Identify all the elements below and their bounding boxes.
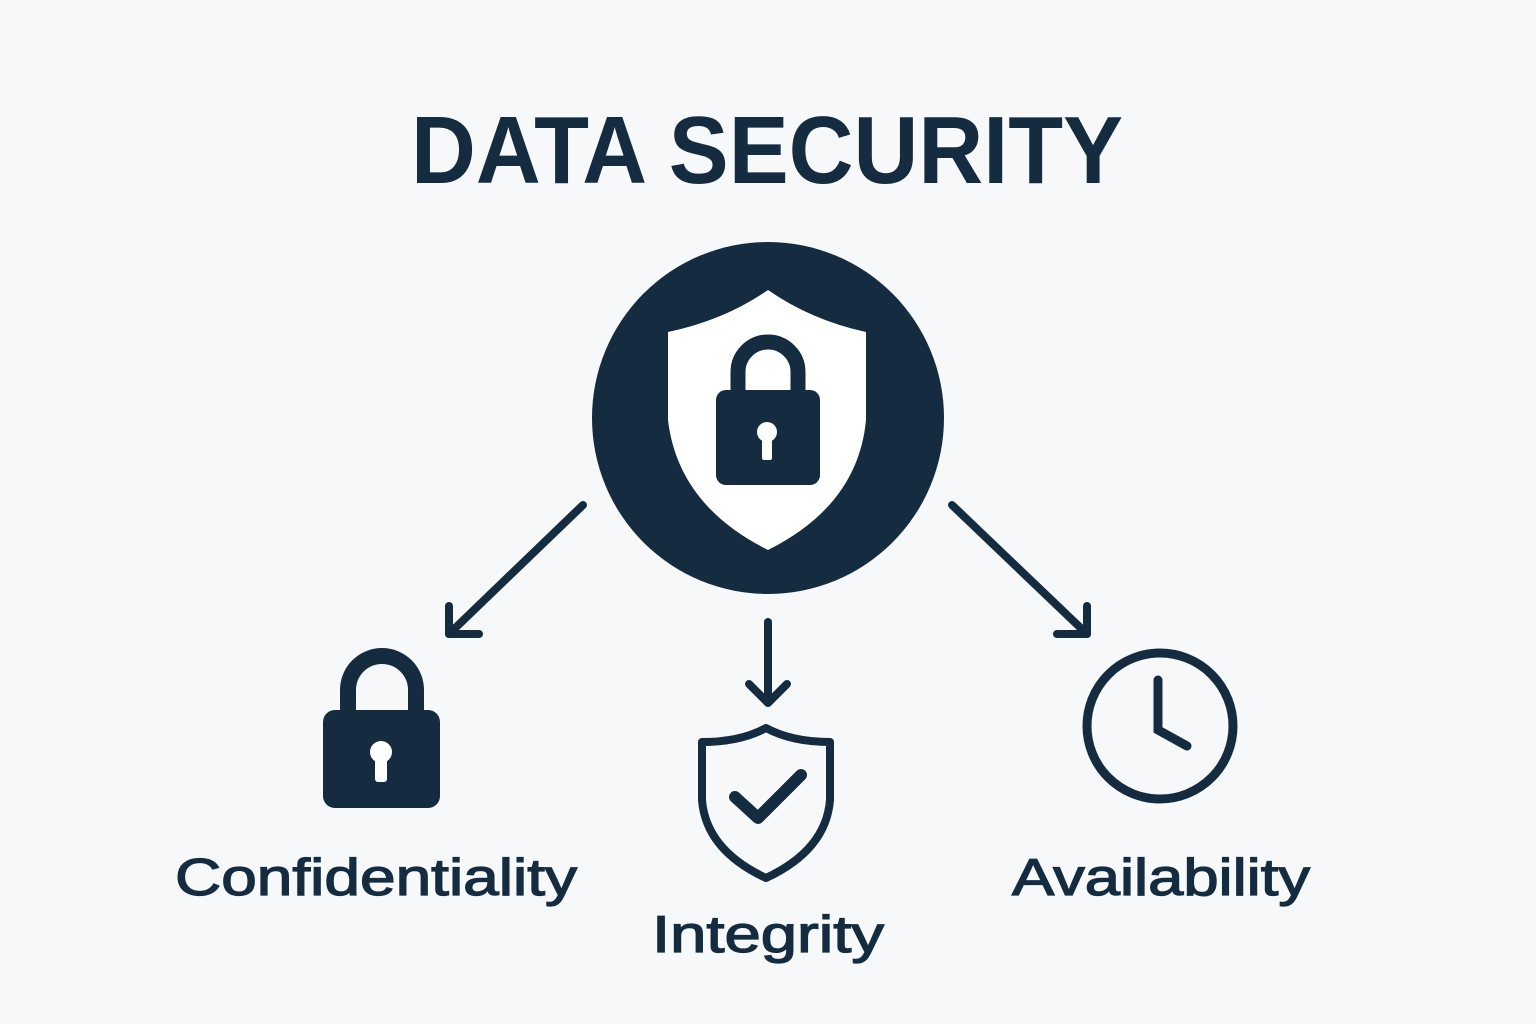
icon: shield with check bbox=[702, 728, 830, 878]
title: DATA SECURITY bbox=[411, 97, 1123, 204]
label: integrity: Integrity bbox=[652, 906, 884, 964]
icon: padlock bbox=[323, 656, 440, 808]
arrow: to availability bbox=[952, 505, 1087, 634]
icon: clock bbox=[1087, 653, 1233, 799]
label: availability: Availability bbox=[1012, 849, 1310, 907]
central icon: shield with lock in circle bbox=[592, 242, 944, 594]
arrow: to integrity bbox=[749, 622, 787, 703]
label: confidentiality: Confidentiality bbox=[175, 849, 577, 907]
arrow: to confidentiality bbox=[449, 505, 583, 634]
